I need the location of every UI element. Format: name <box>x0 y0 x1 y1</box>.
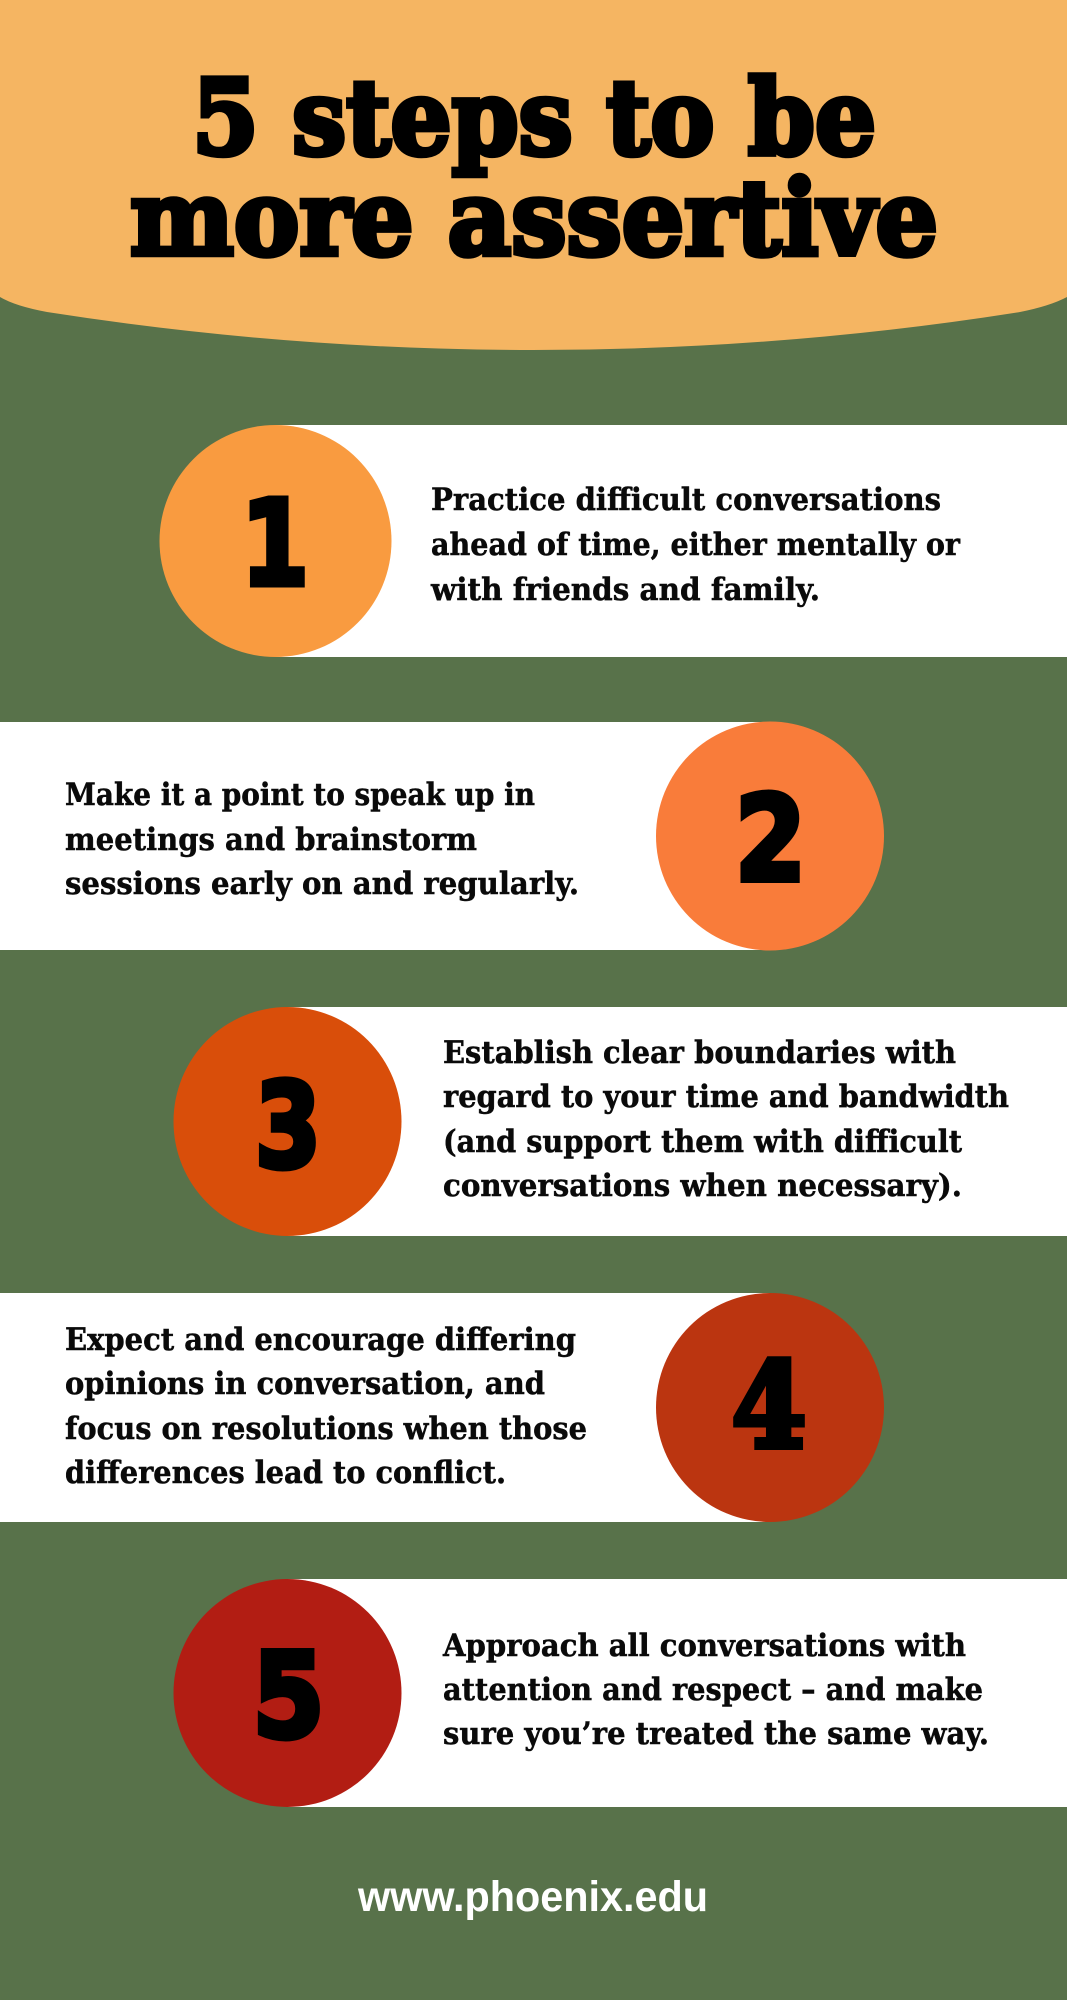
step 5 text: attention and respect – and make <box>443 1672 983 1708</box>
icon: number 2 circle <box>656 722 884 950</box>
title: 5 steps to be <box>192 56 876 179</box>
step 3 text: Establish clear boundaries with <box>443 1035 956 1071</box>
step 2 text: Make it a point to speak up in <box>65 777 535 813</box>
step 2 text: sessions early on and regularly. <box>65 866 579 902</box>
panel: step 5 <box>174 1579 1067 1807</box>
step 1 text: with friends and family. <box>430 572 820 608</box>
panel: step 2 <box>0 722 884 950</box>
step 1 text <box>430 482 961 608</box>
footer url: www.phoenix.edu <box>357 1873 708 1921</box>
step 4 text: Expect and encourage differing <box>65 1322 576 1358</box>
icon: number 5 circle: 5 <box>252 1627 324 1765</box>
step 4 text: focus on resolutions when those <box>65 1411 587 1447</box>
icon: number 1 circle: 1 <box>241 474 309 612</box>
icon: number 3 circle: 3 <box>255 1057 321 1195</box>
icon: number 2 circle: 2 <box>735 770 806 908</box>
header banner <box>0 0 1067 350</box>
step 1 text: Practice difficult conversations <box>431 482 941 518</box>
step 4 text: differences lead to conflict. <box>65 1455 506 1491</box>
step 3 text <box>443 1035 1009 1204</box>
title <box>130 56 938 280</box>
step 4 text: opinions in conversation, and <box>65 1366 545 1402</box>
step 5 text <box>442 1628 989 1752</box>
step 2 text: meetings and brainstorm <box>65 822 477 858</box>
step 1 text: ahead of time, either mentally or <box>431 527 961 563</box>
icon: number 5 circle <box>174 1579 402 1807</box>
step 5 text: Approach all conversations with <box>442 1628 966 1664</box>
step 3 text: conversations when necessary). <box>443 1168 962 1204</box>
step 3 text: (and support them with difficult <box>443 1124 963 1160</box>
icon: number 4 circle: 4 <box>732 1336 806 1475</box>
step 5 text: sure you’re treated the same way. <box>443 1716 989 1752</box>
step 3 text: regard to your time and bandwidth <box>443 1079 1009 1115</box>
icon: number 1 circle <box>160 425 392 657</box>
panel: step 3 <box>174 1007 1067 1236</box>
step 2 text <box>65 777 579 902</box>
panel: step 1 <box>160 425 1067 657</box>
icon: number 4 circle <box>656 1293 884 1522</box>
panel: step 4 <box>0 1293 884 1522</box>
icon: number 3 circle <box>174 1007 402 1236</box>
title: more assertive <box>130 156 938 280</box>
step 4 text <box>65 1322 587 1491</box>
